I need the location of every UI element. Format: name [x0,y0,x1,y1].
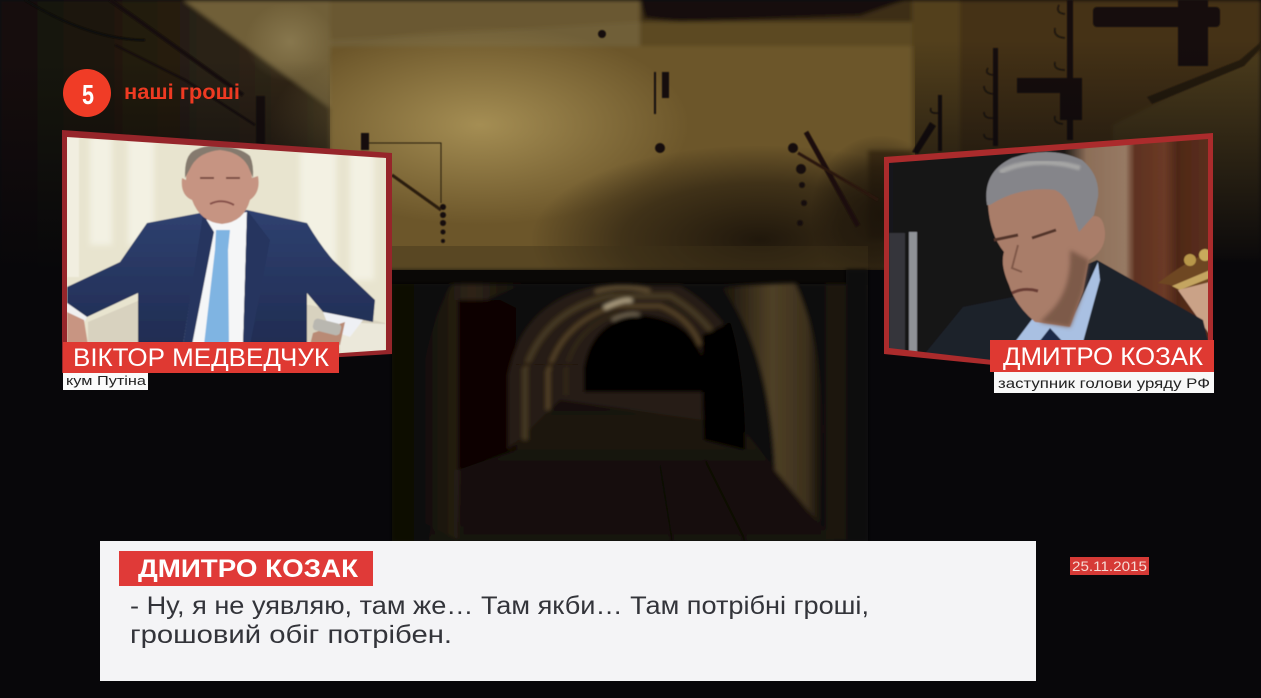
tunnel opening [392,270,868,542]
panel: portrait Kozak [884,133,1213,390]
quote text [130,592,869,649]
head [182,146,259,224]
tie [204,230,230,345]
right hand, cuff, watch [323,312,363,337]
speaker name [119,551,373,586]
label: Kozak role [994,372,1214,393]
left hand and cuff [67,303,87,323]
shirt [1015,262,1100,342]
neck and face [988,174,1105,327]
speaker name: ДМИТРО КОЗАК [138,555,359,583]
fade of side walls [0,60,330,272]
wall shading [245,2,335,82]
suit [67,210,375,345]
label: Medvedchuk role [63,373,148,390]
left doorway [458,300,516,470]
tie [1040,328,1062,340]
panel: quote [100,541,1036,681]
rails [660,460,745,540]
quote text: - Ну, я не уявляю, там же… Там якби… Там потрібні гроші, [130,592,869,620]
suit [926,260,1208,360]
right doorway [702,322,745,450]
right arch [722,283,822,525]
upper walls [0,0,1261,270]
sofa [88,300,385,352]
icon: logo circle: 5 [82,79,94,110]
photo [67,137,386,354]
tunnel end [584,315,705,392]
photo [889,139,1208,360]
label: Medvedchuk name: ВІКТОР МЕДВЕДЧУК [73,344,329,372]
logo [63,69,240,117]
label: Kozak name: ДМИТРО КОЗАК [1003,343,1203,371]
frame [62,130,392,373]
fittings [25,0,1261,243]
quote text: грошовий обіг потрібен. [130,621,452,649]
shirt [183,212,247,345]
label: Kozak role: заступник голови уряду РФ [998,375,1210,391]
dark lintel [392,270,868,285]
frame [884,133,1213,387]
central rings [508,286,725,450]
panel: portrait Medvedchuk [60,130,392,375]
chair [1160,257,1208,290]
logo text: наші гроші [124,81,240,104]
pillars [826,284,846,540]
icon: logo circle [63,69,111,117]
date label: 25.11.2015 [1072,559,1147,574]
left arch [418,284,525,540]
label: Medvedchuk role: кум Путіна [66,373,147,388]
hair [986,152,1098,232]
